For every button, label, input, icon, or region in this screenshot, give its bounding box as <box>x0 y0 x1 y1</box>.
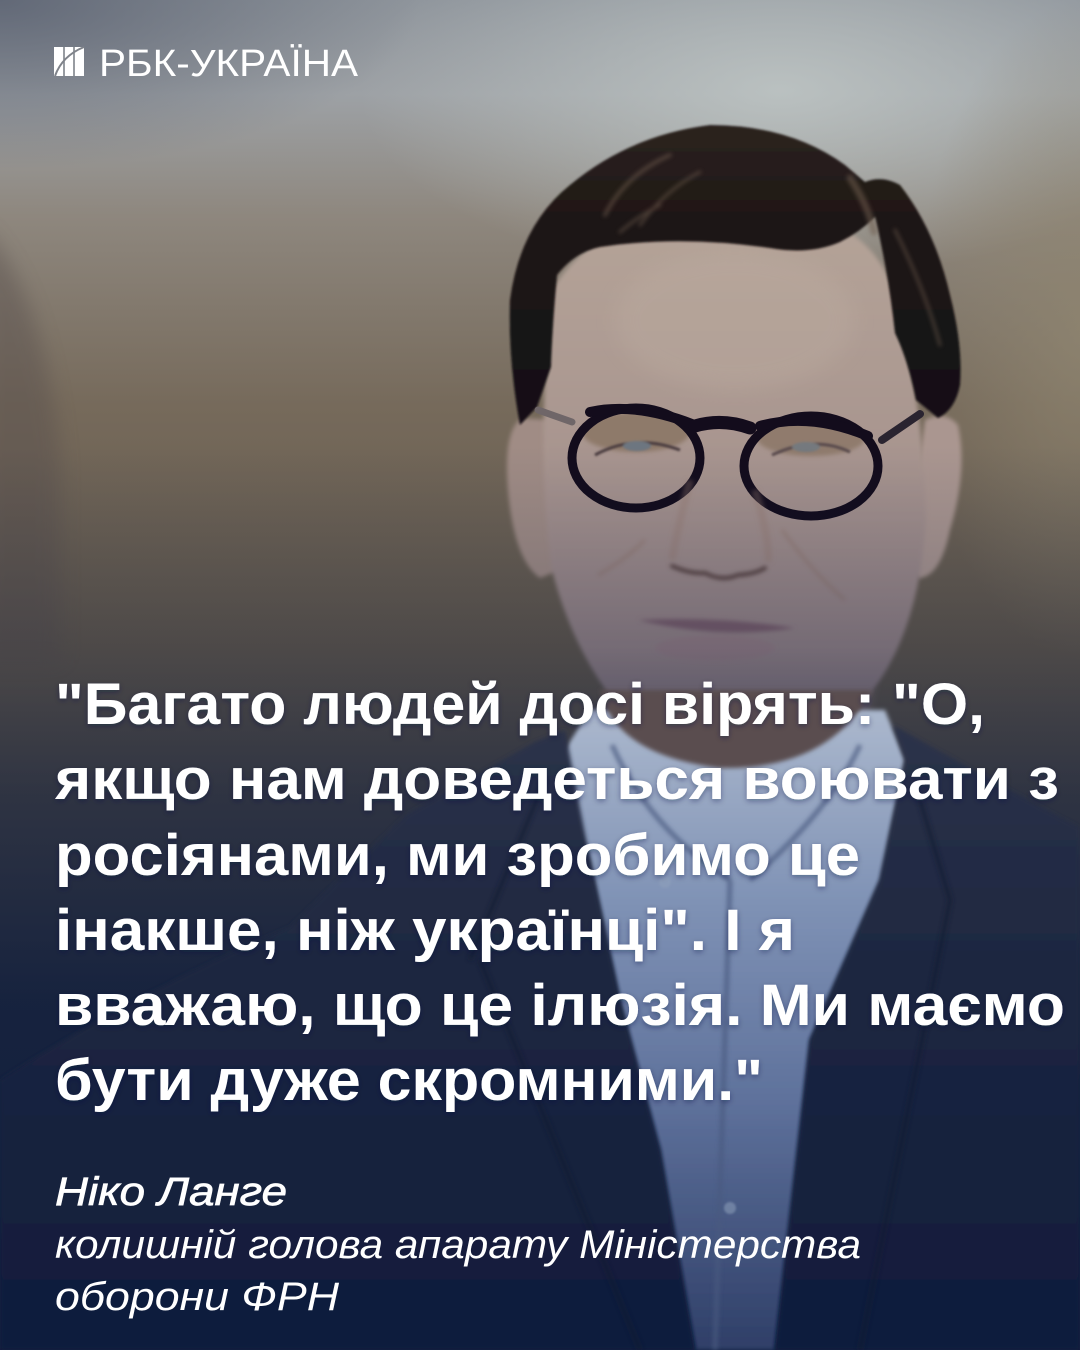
speaker name: Ніко Ланге <box>55 1170 287 1214</box>
neck <box>610 640 880 780</box>
ear: left <box>507 418 560 578</box>
quote: інакше, ніж українці". І я <box>55 898 795 963</box>
eyes <box>595 441 850 455</box>
speaker role: колишній голова апарату Міністерства <box>55 1223 861 1267</box>
face <box>544 211 926 758</box>
jacket left <box>0 730 695 1350</box>
quote: росіянами, ми зробимо це <box>55 823 860 888</box>
quote: "Багато людей досі вірять: "О, <box>55 672 985 737</box>
logo mark <box>54 47 84 76</box>
portrait: torso <box>0 690 1080 1350</box>
attribution <box>55 1170 861 1319</box>
glasses <box>538 408 920 516</box>
shirt buttons <box>659 876 736 1214</box>
shirt <box>555 710 905 1350</box>
logo: RBC-Ukraine <box>54 43 359 85</box>
quote: вважаю, що це ілюзія. Ми маємо <box>55 973 1065 1038</box>
nose <box>672 480 768 578</box>
hair <box>510 125 961 425</box>
neck shadow over collar <box>600 690 872 768</box>
ear: right <box>905 416 962 578</box>
collar shadows <box>612 745 860 1350</box>
quote: бути дуже скромними." <box>55 1048 763 1113</box>
logo wordmark: РБК-УКРАЇНА <box>99 43 359 85</box>
hair highlights <box>605 155 940 345</box>
quote <box>54 672 1065 1113</box>
lens tint <box>582 412 865 456</box>
mouth <box>638 619 795 661</box>
portrait: head <box>507 125 962 780</box>
smile lines <box>598 530 845 600</box>
quote: якщо нам доведеться воювати з <box>54 747 1059 812</box>
speaker role: оборони ФРН <box>55 1275 339 1319</box>
lapel lines <box>470 780 950 1350</box>
jacket right <box>775 725 1080 1350</box>
speaker role <box>55 1223 861 1319</box>
forehead highlight <box>615 250 855 390</box>
